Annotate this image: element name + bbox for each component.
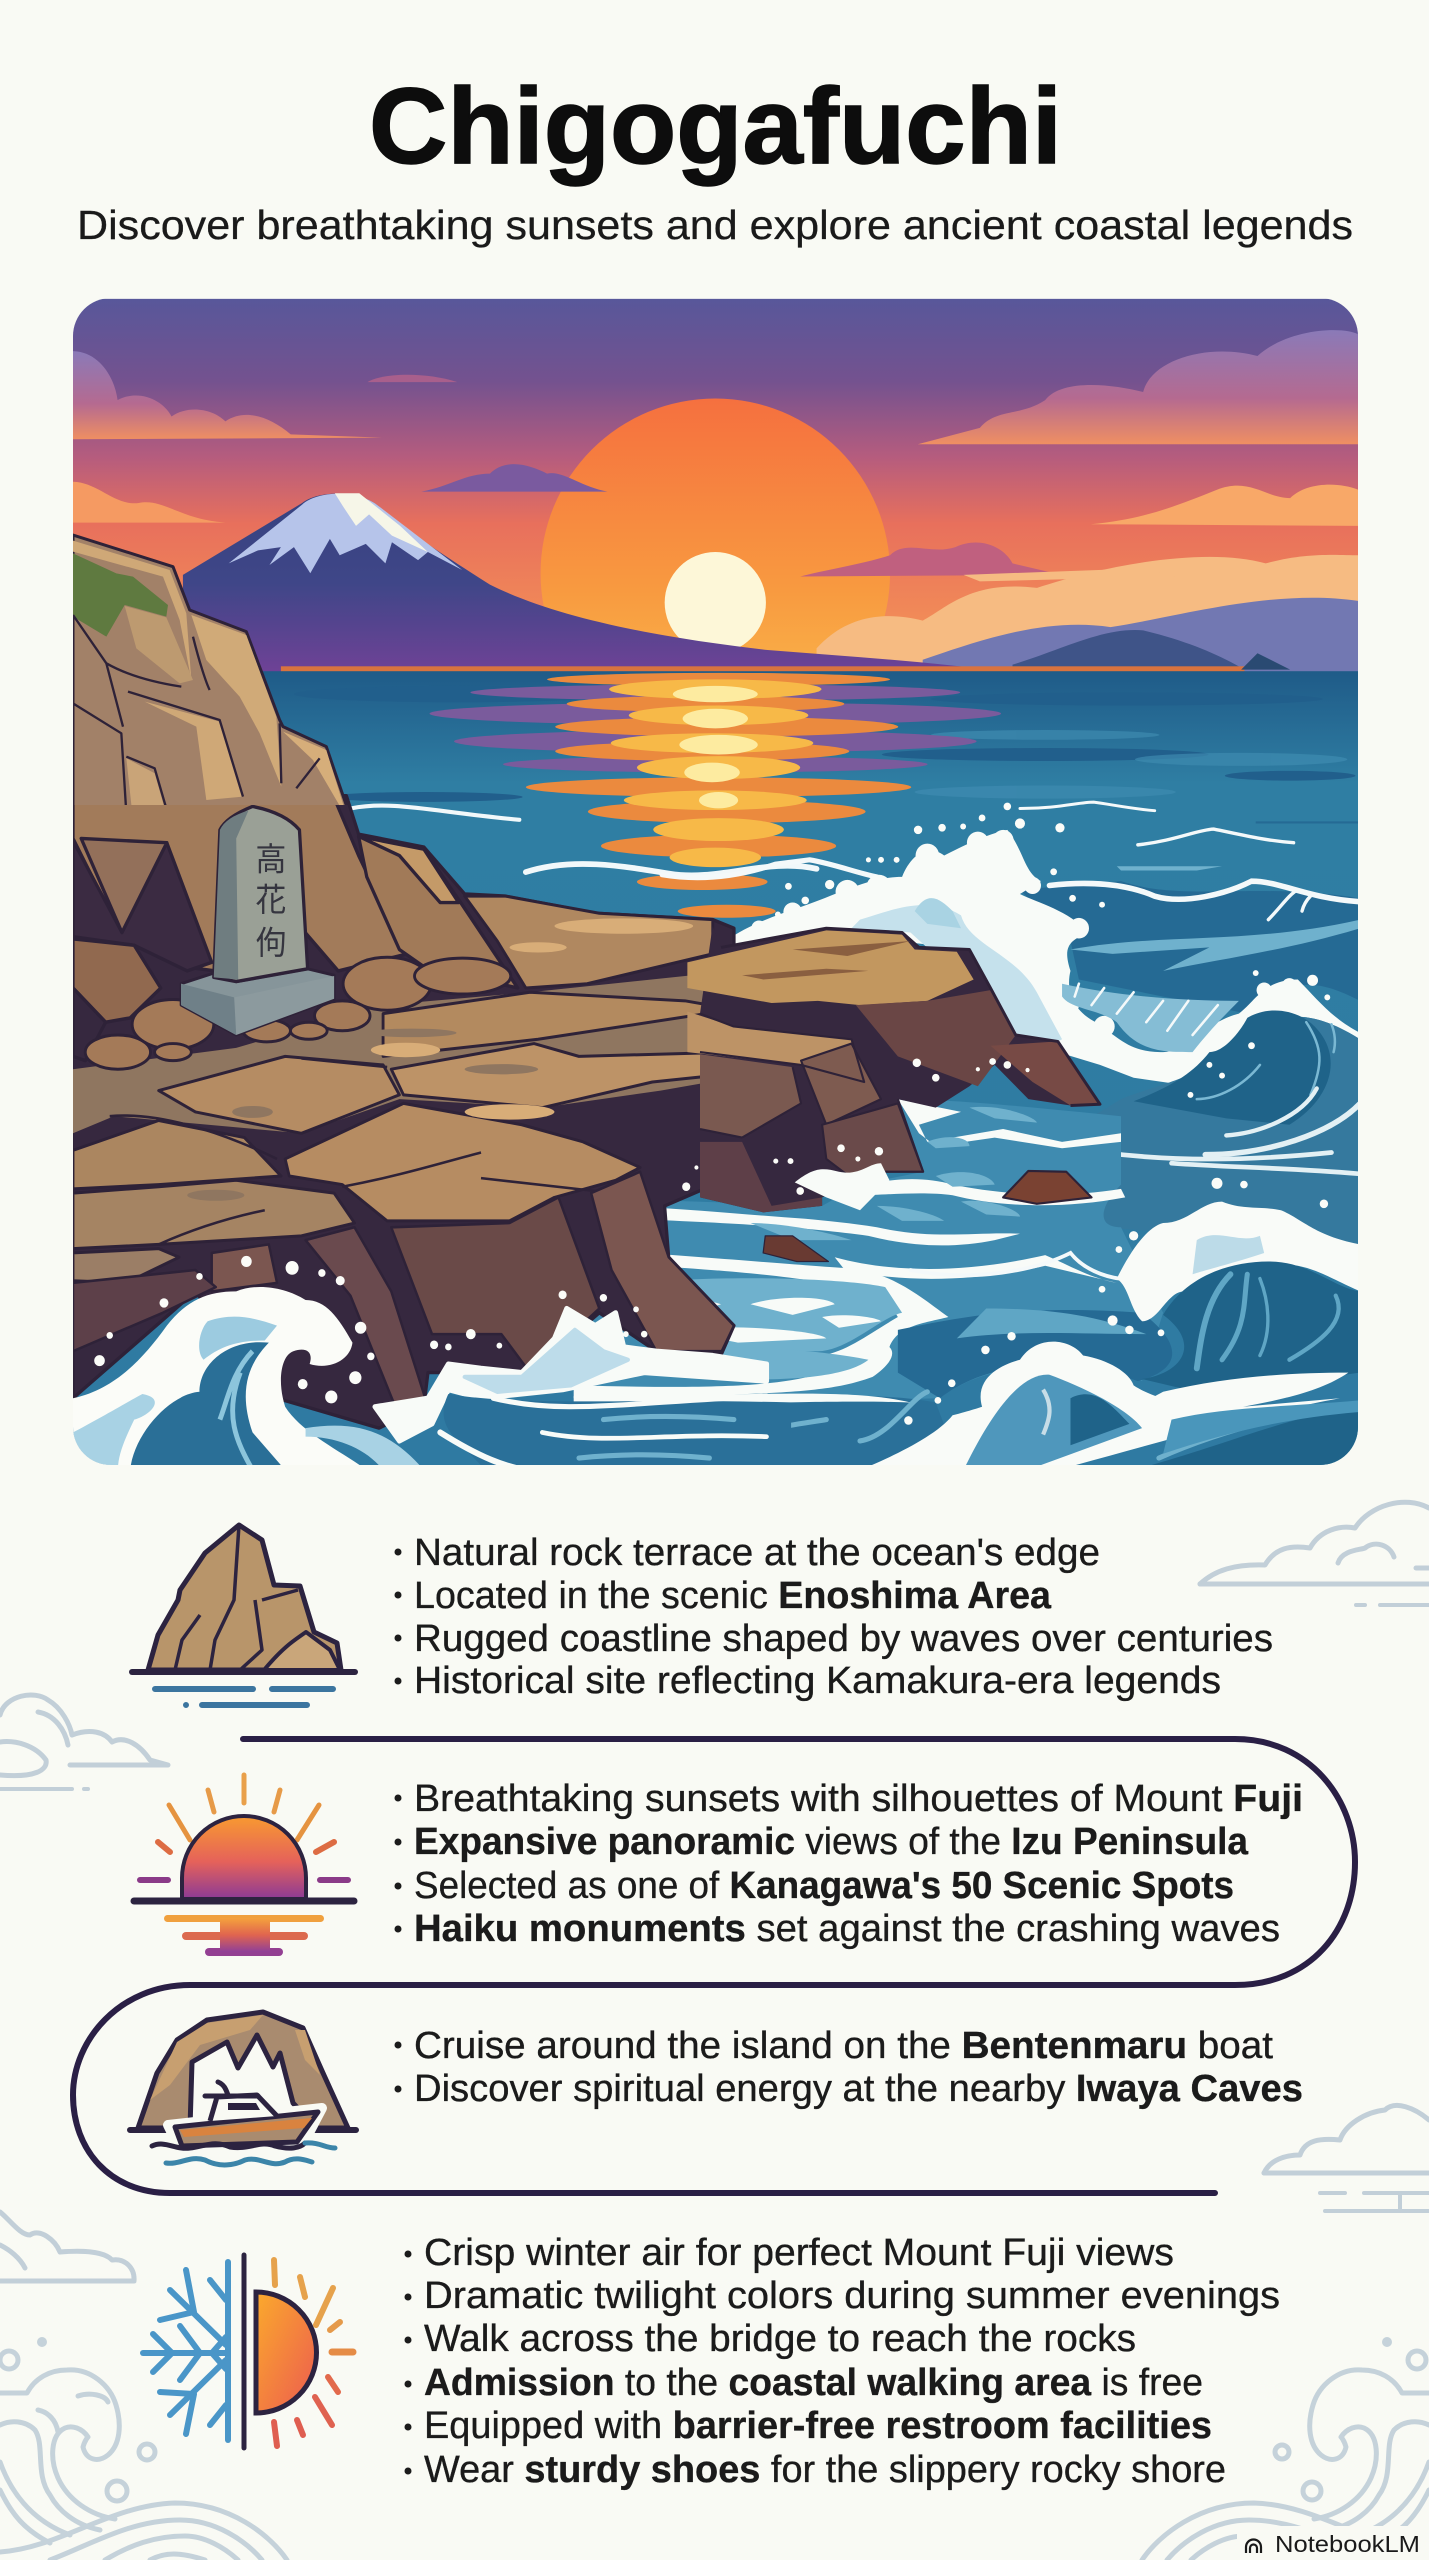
background decoration: wave bottom right — [1142, 2340, 1429, 2560]
text block: tips — [404, 2232, 1280, 2491]
middle and far-right sea with splash — [574, 802, 1360, 1470]
large sun — [540, 398, 890, 654]
text block: cruises and caves: Discover spiritual energy at the nearby Iwaya Caves — [414, 2068, 1303, 2110]
text block: the site: Located in the scenic Enoshima Area — [414, 1575, 1052, 1617]
bottom small wave — [872, 1342, 1156, 1465]
text block: the site: Historical site reflecting Kamakura-era legends — [414, 1660, 1221, 1702]
notebooklm badge — [1237, 2526, 1429, 2560]
right breaking wave — [1117, 1202, 1360, 1330]
text block: cruises and caves: Cruise around the island on the Bentenmaru boat — [414, 2025, 1273, 2067]
monument: 花 — [255, 874, 286, 921]
notebooklm badge: NotebookLM — [1275, 2531, 1420, 2557]
text block: tips: Dramatic twilight colors during summer evenings — [424, 2275, 1280, 2317]
sun reflection — [526, 673, 911, 918]
text block: cruises and caves — [394, 2025, 1303, 2110]
text block: the views: Expansive panoramic views of the Izu Peninsula — [414, 1821, 1249, 1863]
fan wave — [1062, 984, 1239, 1052]
terrace ground — [73, 971, 734, 1133]
text block: tips: Wear sturdy shoes for the slippery rocky shore — [424, 2449, 1226, 2491]
text block: the views — [394, 1778, 1303, 1950]
cliff behind monument — [73, 798, 518, 1061]
text block: the views: Selected as one of Kanagawa's 50 Scenic Spots — [414, 1865, 1234, 1907]
highlights and cracks — [371, 918, 693, 1120]
dark sea shapes — [898, 1310, 1172, 1398]
central foam patches — [574, 1099, 1163, 1407]
boulders — [85, 957, 511, 1069]
rock shadow base — [71, 796, 734, 1428]
sea — [72, 671, 1359, 1471]
background decoration: cloud left middle — [0, 1695, 168, 1789]
rock terraces and monument — [71, 796, 734, 1428]
text block: the site: Rugged coastline shaped by waves over centuries — [414, 1618, 1273, 1660]
bottom dark sea — [791, 1396, 944, 1465]
distant hills — [923, 598, 1359, 673]
text block: the site — [394, 1532, 1273, 1702]
lower right sea — [1168, 1016, 1358, 1084]
background decoration: cloud top right — [1200, 1502, 1429, 1605]
text block: the site: Natural rock terrace at the ocean's edge — [414, 1532, 1100, 1574]
text block: tips: Crisp winter air for perfect Mount Fuji views — [424, 2232, 1174, 2274]
text block: the views: Haiku monuments set against the crashing waves — [414, 1908, 1280, 1950]
background decoration: cloud left lower — [0, 2212, 134, 2281]
dark sea bands — [1020, 821, 1360, 1014]
monument: 佝 — [255, 917, 286, 964]
mount fuji — [183, 493, 1013, 673]
upper cliff — [73, 534, 344, 805]
text block: tips: Admission to the coastal walking area is free — [424, 2362, 1203, 2404]
monument: 高 — [255, 834, 286, 881]
distant crest strokes — [662, 802, 1360, 920]
dark curl — [1134, 1010, 1331, 1125]
clouds — [72, 330, 1359, 673]
flowing frame lines connecting sections — [73, 1739, 1355, 2193]
icon: winter and summer seasons — [143, 2255, 353, 2448]
icon: cave and boat — [130, 2012, 356, 2165]
panel: hero illustration of the coastal sunset — [71, 299, 1360, 1471]
text block: the views: Breathtaking sunsets with silhouettes of Mount Fuji — [414, 1778, 1303, 1820]
icon: rock over water — [132, 1525, 355, 1705]
distant wave crests — [351, 806, 817, 875]
background decoration: cloud right lower — [1264, 2105, 1429, 2211]
title: Chigogafuchi — [369, 65, 1062, 186]
horizon band — [280, 666, 1244, 672]
monument — [181, 806, 334, 1035]
text block: tips: Equipped with barrier-free restroom facilities — [424, 2405, 1212, 2447]
text block: tips: Walk across the bridge to reach the rocks — [424, 2318, 1136, 2360]
rock side faces — [73, 1172, 734, 1407]
sky — [73, 298, 1358, 621]
purple reflection — [430, 684, 1001, 772]
foreground wave at cliff base — [73, 1165, 791, 1470]
subtitle: Discover breathtaking sunsets and explore ancient coastal legends — [77, 202, 1353, 248]
icon: sunset — [134, 1775, 354, 1956]
inner sun — [665, 552, 766, 653]
big white splash — [721, 830, 1360, 1086]
right rock outcrop — [687, 803, 1360, 1470]
background decoration: wave bottom left — [0, 2340, 287, 2560]
